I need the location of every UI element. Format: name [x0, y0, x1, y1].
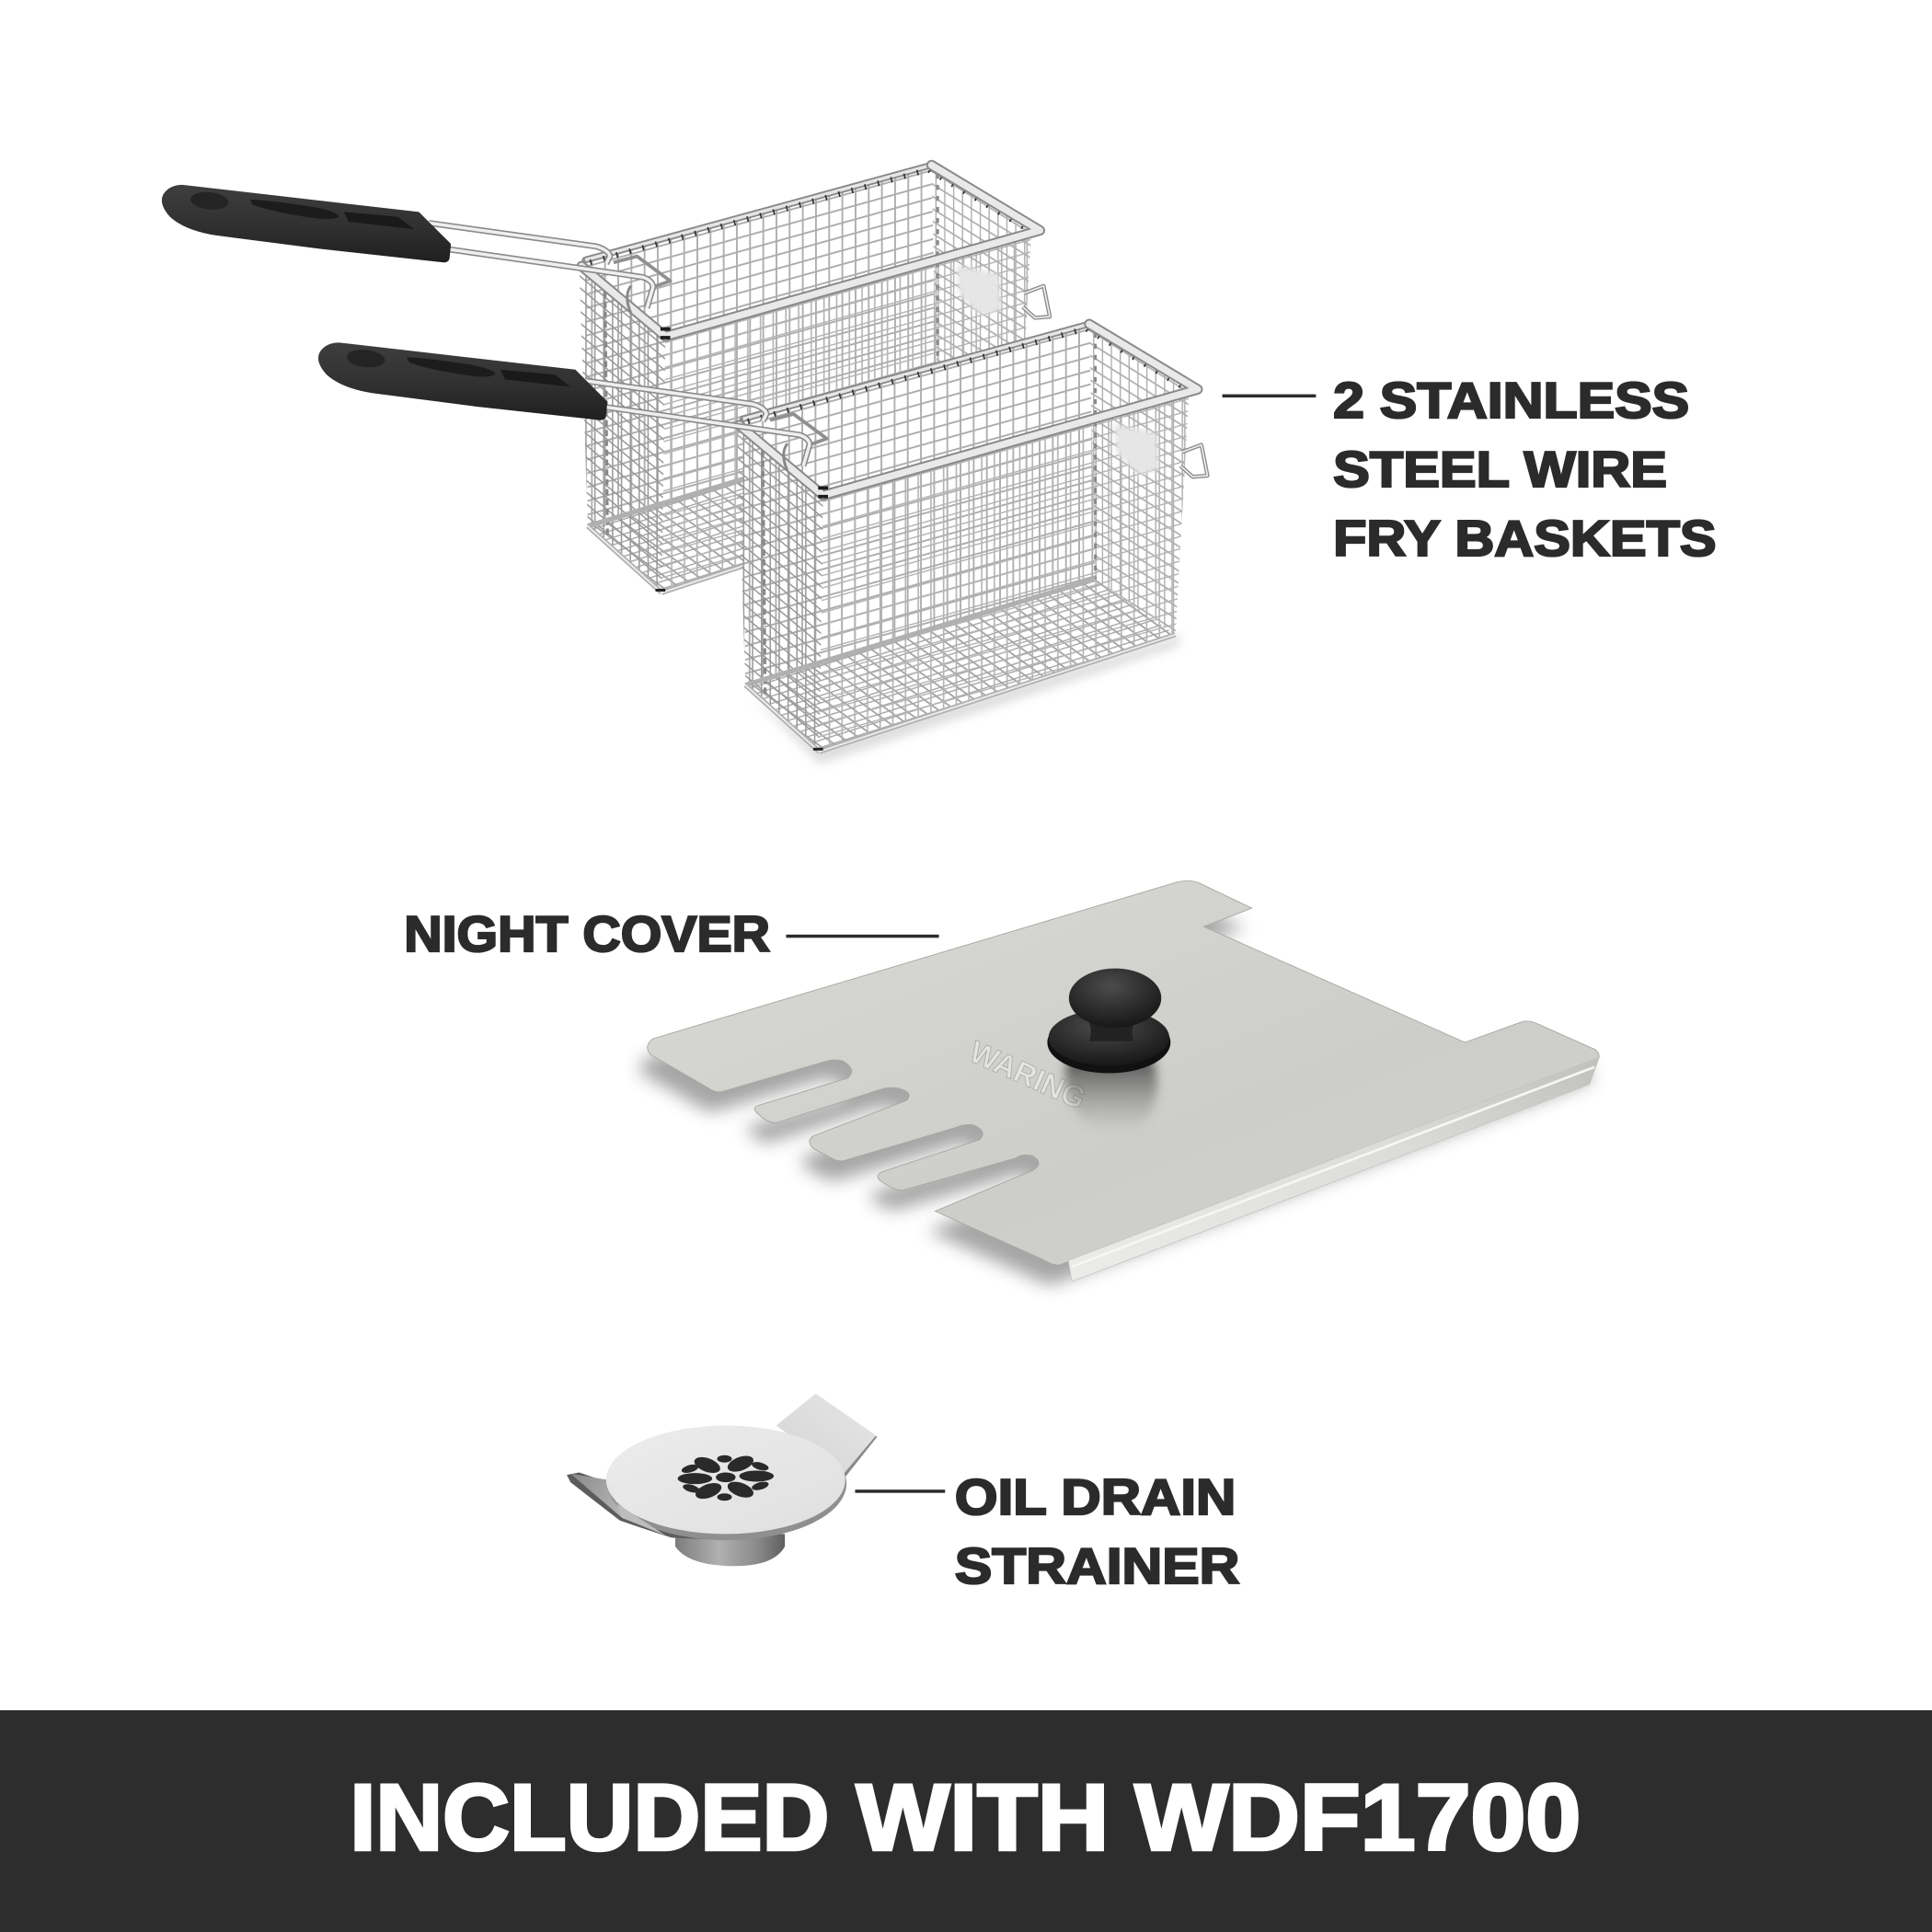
front fry basket — [737, 324, 1207, 752]
left wing — [567, 1472, 727, 1540]
embossed brand: WARING — [964, 1035, 1090, 1117]
knob — [1047, 969, 1170, 1074]
footer title — [350, 1765, 1581, 1869]
label: night cover: NIGHT COVER — [404, 905, 770, 962]
plate — [648, 880, 1599, 1265]
front fold lip — [1068, 1057, 1599, 1282]
label: fry baskets: FRY BASKETS — [1333, 510, 1717, 567]
front basket handle — [318, 342, 827, 471]
disc — [607, 1427, 846, 1540]
night cover — [640, 880, 1599, 1285]
footer title: INCLUDED — [350, 1765, 829, 1869]
label: oil drain strainer: OIL DRAIN — [955, 1468, 1236, 1525]
strainer foot — [675, 1534, 785, 1566]
leader line: strainer — [855, 1489, 945, 1493]
knob reflection — [1065, 1060, 1157, 1133]
front basket shadow — [752, 635, 1183, 764]
footer title: WITH — [857, 1765, 1109, 1869]
label: fry baskets: STEEL WIRE — [1333, 441, 1667, 498]
label: fry baskets: 2 STAINLESS — [1333, 372, 1689, 429]
oil drain strainer — [567, 1394, 878, 1566]
label: oil drain strainer — [955, 1468, 1239, 1594]
label: fry baskets — [1333, 372, 1717, 567]
footer title: WDF1700 — [1134, 1765, 1581, 1869]
footer band — [0, 1710, 1932, 1932]
rear basket handle — [162, 185, 671, 313]
right wing — [813, 1434, 878, 1497]
label: oil drain strainer: STRAINER — [955, 1537, 1239, 1594]
rear fry basket — [579, 165, 1050, 592]
drain holes — [678, 1453, 774, 1501]
leader line: night cover — [786, 935, 939, 937]
plate shadow — [640, 901, 1592, 1285]
leader line: baskets — [1223, 395, 1316, 397]
